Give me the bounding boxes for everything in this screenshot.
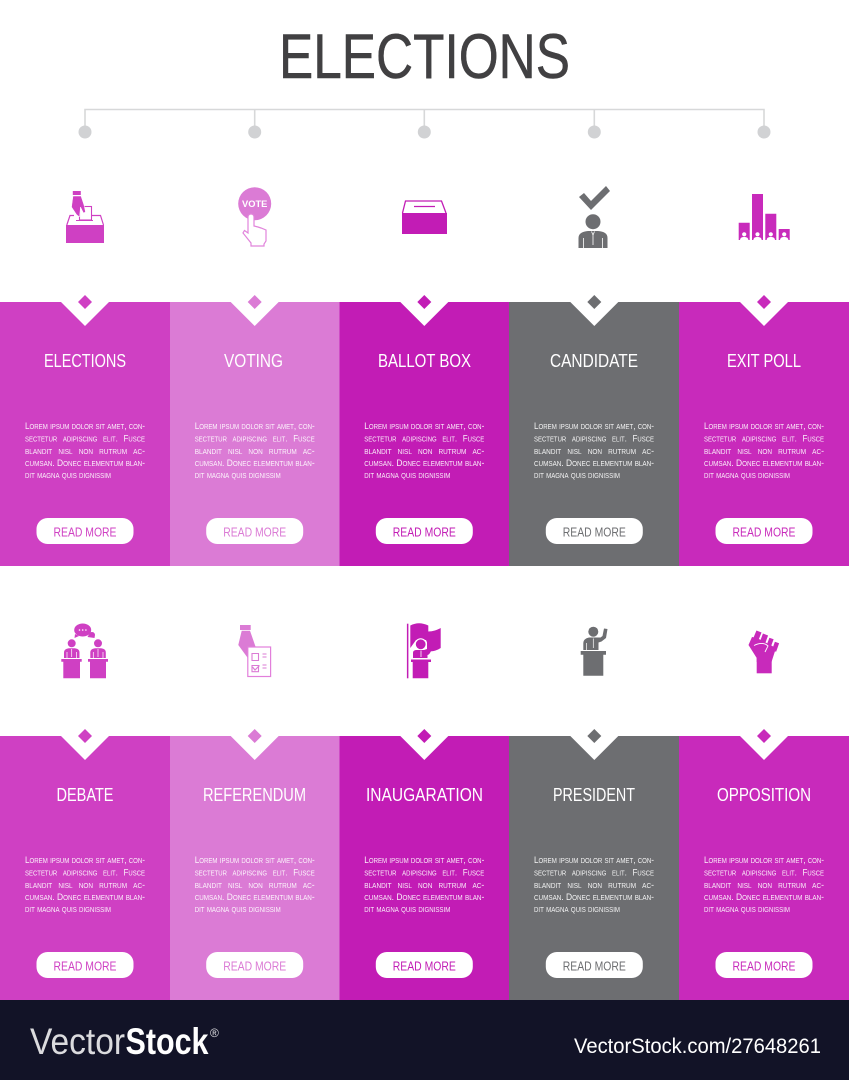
connector timeline with five nodes xyxy=(78,110,770,138)
panel: elections: sectetur adipiscing elit. Fusce xyxy=(25,432,145,444)
panel: elections: dit magna quis dignissim xyxy=(25,469,111,480)
icon: ballot box xyxy=(402,201,447,234)
panel: voting: READ MORE xyxy=(223,524,286,540)
icon: hand casting ballot xyxy=(66,191,104,243)
icon: inauguration speaker and flag xyxy=(407,623,441,678)
panel: president: Lorem ipsum dolor sit amet, con- xyxy=(534,854,654,865)
panel: ballot box: cumsan. Donec elementum blan- xyxy=(364,457,484,468)
panel: voting xyxy=(170,295,340,566)
panel: ballot box: dit magna quis dignissim xyxy=(364,469,450,480)
icon: referendum hand and form xyxy=(238,625,271,676)
panel: referendum: blandit nisl non rutrum ac- xyxy=(195,879,315,890)
panel: elections: READ MORE xyxy=(54,524,117,540)
icon: debate xyxy=(61,624,108,678)
panel: voting: blandit nisl non rutrum ac- xyxy=(195,445,315,456)
panel: opposition xyxy=(679,729,849,1000)
panel: candidate: dit magna quis dignissim xyxy=(534,469,620,480)
panel: ballot box: BALLOT BOX xyxy=(378,350,471,371)
panel: exit poll: dit magna quis dignissim xyxy=(704,469,790,480)
panel: president: cumsan. Donec elementum blan- xyxy=(534,891,654,902)
panel: inaugaration: Lorem ipsum dolor sit amet, con- xyxy=(364,854,484,865)
icon: candidate with check mark xyxy=(578,186,610,248)
panel: president: PRESIDENT xyxy=(553,784,635,805)
panel: exit poll: blandit nisl non rutrum ac- xyxy=(704,445,824,456)
panel: exit poll xyxy=(679,295,849,566)
panel: elections xyxy=(0,295,170,566)
panel: inaugaration: dit magna quis dignissim xyxy=(364,903,450,914)
panel: opposition: sectetur adipiscing elit. Fusce xyxy=(704,866,824,878)
panel: referendum: Lorem ipsum dolor sit amet, con- xyxy=(195,854,315,865)
panel: elections: Lorem ipsum dolor sit amet, con- xyxy=(25,420,145,431)
panel: ballot box: sectetur adipiscing elit. Fusce xyxy=(364,432,485,444)
panel: exit poll: sectetur adipiscing elit. Fusce xyxy=(704,432,824,444)
panel: inaugaration: blandit nisl non rutrum ac- xyxy=(364,879,484,890)
panel: candidate: cumsan. Donec elementum blan- xyxy=(534,457,654,468)
panel: debate: cumsan. Donec elementum blan- xyxy=(25,891,145,902)
panel: debate xyxy=(0,729,170,1000)
panel: voting: VOTING xyxy=(224,350,283,371)
panel: debate: Lorem ipsum dolor sit amet, con- xyxy=(25,854,145,865)
panel: candidate: sectetur adipiscing elit. Fusce xyxy=(534,432,654,444)
icon: exit poll bars xyxy=(739,194,790,240)
footer: VectorStock watermark bar xyxy=(0,1000,849,1080)
panel: ballot box xyxy=(340,295,509,566)
panel: opposition: cumsan. Donec elementum blan- xyxy=(704,891,824,902)
panel: debate: blandit nisl non rutrum ac- xyxy=(25,879,145,890)
panel: inaugaration: INAUGARATION xyxy=(366,784,483,805)
panel: debate: READ MORE xyxy=(54,958,117,974)
footer: VectorStock watermark bar: Vector xyxy=(30,1021,125,1062)
panel: referendum: cumsan. Donec elementum blan- xyxy=(195,891,315,902)
panel: exit poll: READ MORE xyxy=(732,524,796,540)
panel: referendum xyxy=(170,729,340,1000)
panel: referendum: READ MORE xyxy=(223,958,286,974)
panel: debate: sectetur adipiscing elit. Fusce xyxy=(25,866,145,878)
panel: president xyxy=(509,729,679,1000)
footer: VectorStock watermark bar: VectorStock.com/27648261 xyxy=(574,1035,821,1058)
panel: candidate: CANDIDATE xyxy=(550,350,638,371)
icon: vote button with pointer xyxy=(238,187,271,246)
panel: elections: ELECTIONS xyxy=(44,350,126,371)
panel: inaugaration: sectetur adipiscing elit. Fusce xyxy=(364,866,485,878)
panel: exit poll: cumsan. Donec elementum blan- xyxy=(704,457,824,468)
panel: referendum: REFERENDUM xyxy=(203,784,306,805)
panel: referendum: sectetur adipiscing elit. Fusce xyxy=(195,866,315,878)
panel: debate: DEBATE xyxy=(56,784,114,805)
panel: elections: cumsan. Donec elementum blan- xyxy=(25,457,145,468)
panel: ballot box: Lorem ipsum dolor sit amet, con- xyxy=(364,420,484,431)
panel: voting: Lorem ipsum dolor sit amet, con- xyxy=(195,420,315,431)
icon: president at podium xyxy=(581,627,608,676)
panel: candidate: READ MORE xyxy=(563,524,626,540)
panel: voting: dit magna quis dignissim xyxy=(195,469,281,480)
panel: ballot box: blandit nisl non rutrum ac- xyxy=(364,445,484,456)
panel: exit poll: Lorem ipsum dolor sit amet, con- xyxy=(704,420,824,431)
panel: president: READ MORE xyxy=(563,958,626,974)
panel: voting: cumsan. Donec elementum blan- xyxy=(195,457,315,468)
icon: raised fist opposition xyxy=(748,632,777,673)
panel: ballot box: READ MORE xyxy=(393,524,456,540)
panel: opposition: dit magna quis dignissim xyxy=(704,903,790,914)
panel: opposition: blandit nisl non rutrum ac- xyxy=(704,879,824,890)
panel: inaugaration: READ MORE xyxy=(393,958,456,974)
panel: referendum: dit magna quis dignissim xyxy=(195,903,281,914)
title: ELECTIONS xyxy=(279,22,570,92)
panel: president: sectetur adipiscing elit. Fusce xyxy=(534,866,654,878)
icon: vote button with pointer: VOTE xyxy=(242,199,267,209)
panel: exit poll: EXIT POLL xyxy=(727,350,801,371)
panel: inaugaration xyxy=(340,729,509,1000)
panel: president: dit magna quis dignissim xyxy=(534,903,620,914)
panel: elections: blandit nisl non rutrum ac- xyxy=(25,445,145,456)
panel: candidate: blandit nisl non rutrum ac- xyxy=(534,445,654,456)
footer: VectorStock watermark bar: Stock xyxy=(126,1021,209,1062)
footer: VectorStock watermark bar: ® xyxy=(210,1026,219,1040)
panel: opposition: OPPOSITION xyxy=(717,784,811,805)
panel: opposition: Lorem ipsum dolor sit amet, con- xyxy=(704,854,824,865)
panel: opposition: READ MORE xyxy=(732,958,796,974)
panel: voting: sectetur adipiscing elit. Fusce xyxy=(195,432,315,444)
panel: candidate xyxy=(509,295,679,566)
panel: president: blandit nisl non rutrum ac- xyxy=(534,879,654,890)
panel: candidate: Lorem ipsum dolor sit amet, con- xyxy=(534,420,654,431)
panel: debate: dit magna quis dignissim xyxy=(25,903,111,914)
panel: inaugaration: cumsan. Donec elementum blan- xyxy=(364,891,484,902)
